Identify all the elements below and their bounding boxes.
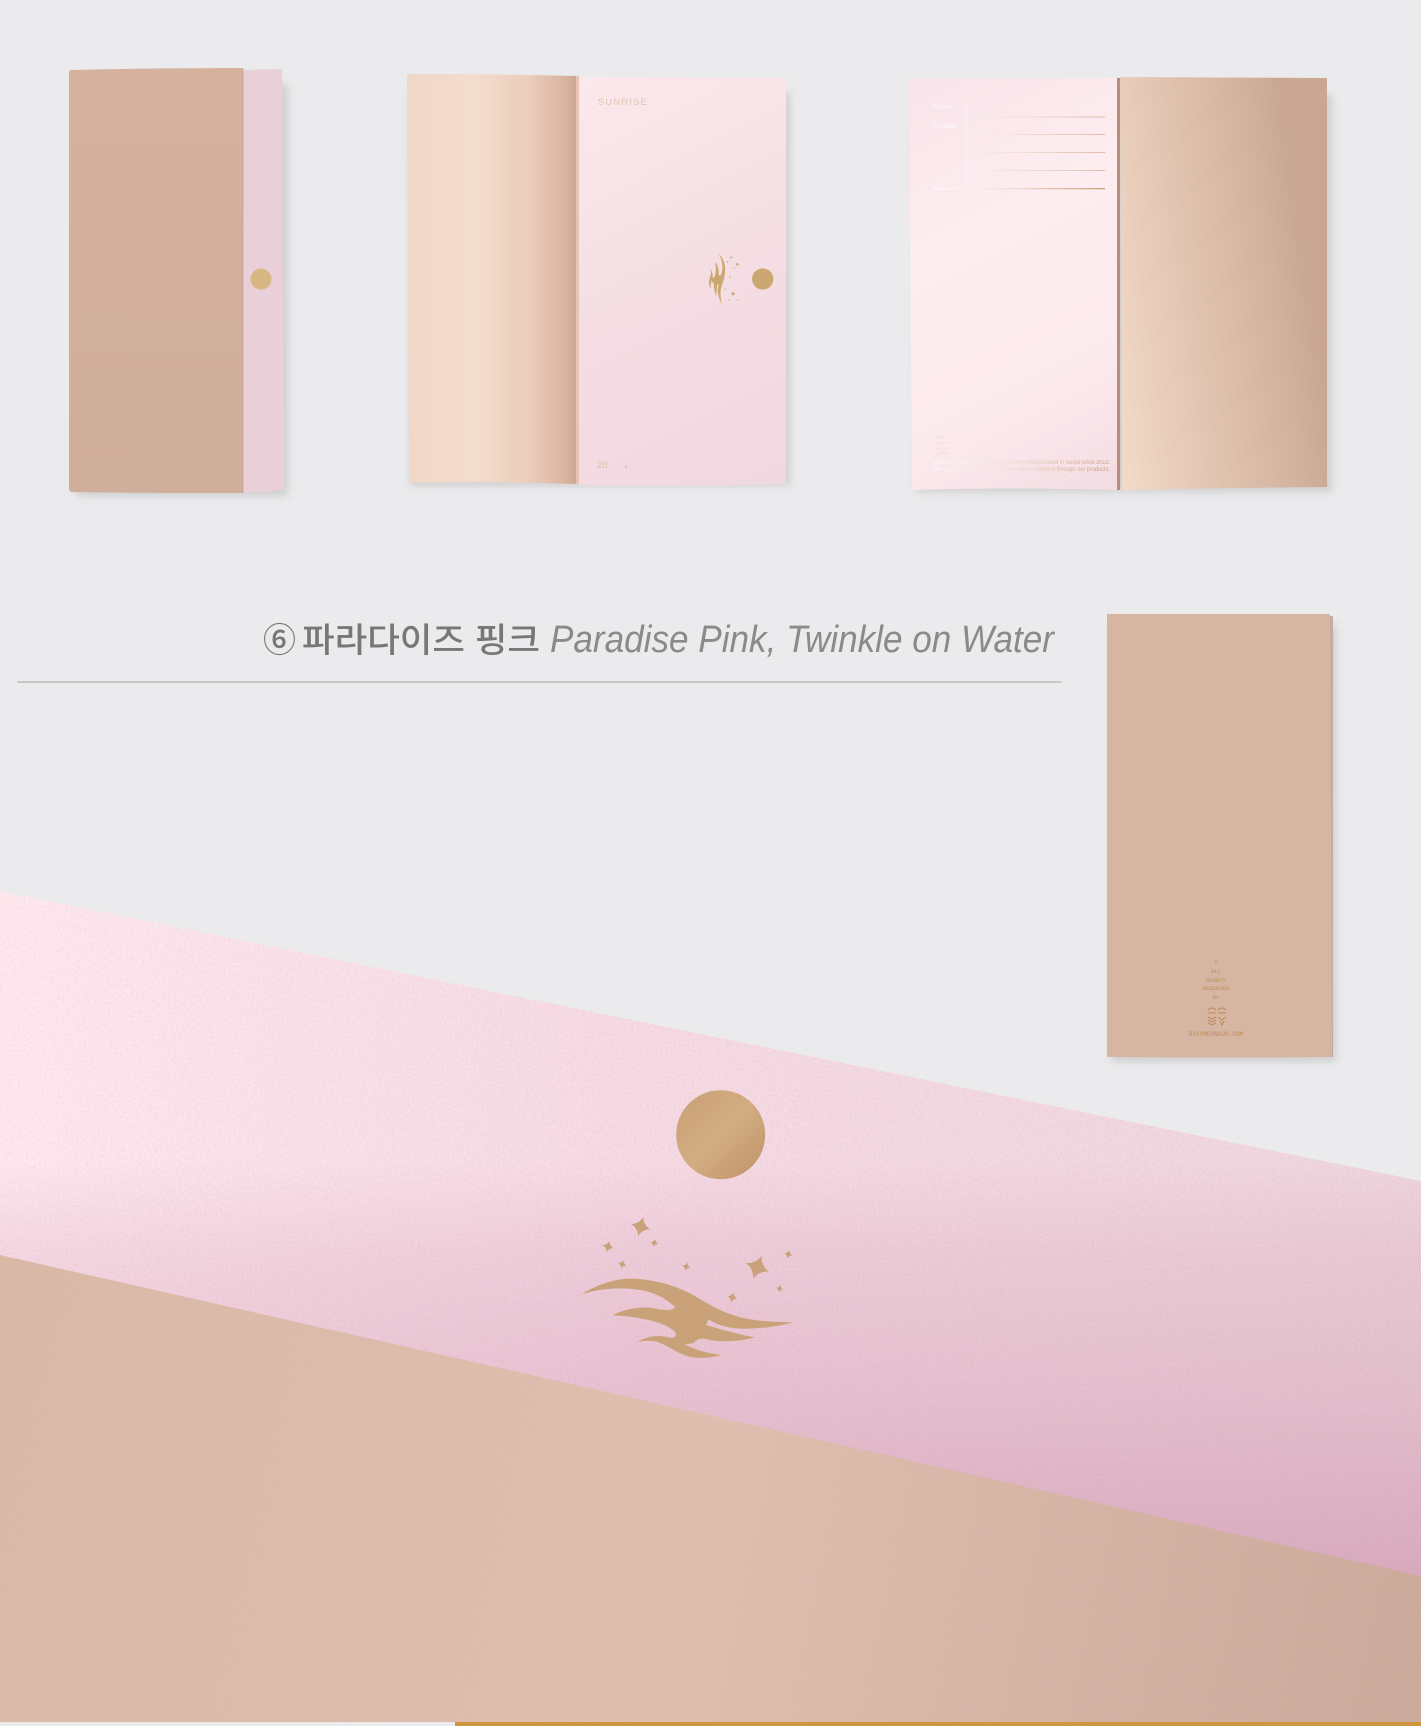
foil logo small <box>704 244 776 306</box>
closeup: tan page foreground <box>0 1255 1421 1722</box>
title rule <box>18 681 1062 683</box>
tan front cover <box>69 68 243 493</box>
back cover credits: © <box>1214 959 1218 966</box>
back cover credits: RIGHTS <box>1206 977 1227 984</box>
back cover credits: RESERVED <box>1203 985 1230 992</box>
label 20: 20 <box>597 460 608 471</box>
footer statement: We respect the way to match your every moment through our products. <box>933 467 1110 473</box>
notebook: open, tan left and pink right with SUNRISE <box>407 74 790 486</box>
right tan page <box>1120 77 1327 490</box>
form fields: Contact <box>933 123 957 130</box>
back cover credits <box>1189 959 1243 1038</box>
title: Paradise Pink: 파라다이즈 핑크 <box>302 622 540 660</box>
form fields <box>933 100 1105 189</box>
notebook: closed with pink cover peeking out <box>69 68 288 496</box>
label SUNRISE: SUNRISE <box>598 97 648 108</box>
back cover credits: BY <box>1213 994 1220 1001</box>
left pink page <box>909 78 1120 490</box>
back cover credits: BYSOMEONSUG.COM <box>1189 1031 1243 1038</box>
notebook: open, pink left with form lines and tan right <box>909 77 1332 492</box>
foil moon <box>676 1090 765 1179</box>
title: Paradise Pink <box>263 619 1055 661</box>
right pink page <box>579 77 786 486</box>
form fields: Name <box>933 104 952 111</box>
stitching <box>1117 78 1120 490</box>
back cover credits: ALL <box>1211 968 1221 975</box>
brand mark <box>1208 1008 1226 1025</box>
foil waves and stars <box>582 1214 794 1358</box>
gold strip at bottom edge <box>455 1722 1421 1726</box>
closeup: pink cover with foil moon, stars and waves <box>0 891 1421 1600</box>
title: Paradise Pink: Paradise Pink, Twinkle on Water <box>550 619 1055 661</box>
notebook: back cover <box>1107 614 1336 1062</box>
pink back cover with foil circle <box>240 69 284 493</box>
footer statement <box>933 460 1110 473</box>
dot <box>625 466 627 468</box>
left tan page <box>407 74 577 484</box>
stitching <box>576 76 579 484</box>
brand mark pale <box>936 437 948 455</box>
footer statement: Sunshine paper is a design stationery brand based in Seoul since 2013. <box>933 460 1110 466</box>
title: Paradise Pink: ⑥ <box>263 622 296 660</box>
